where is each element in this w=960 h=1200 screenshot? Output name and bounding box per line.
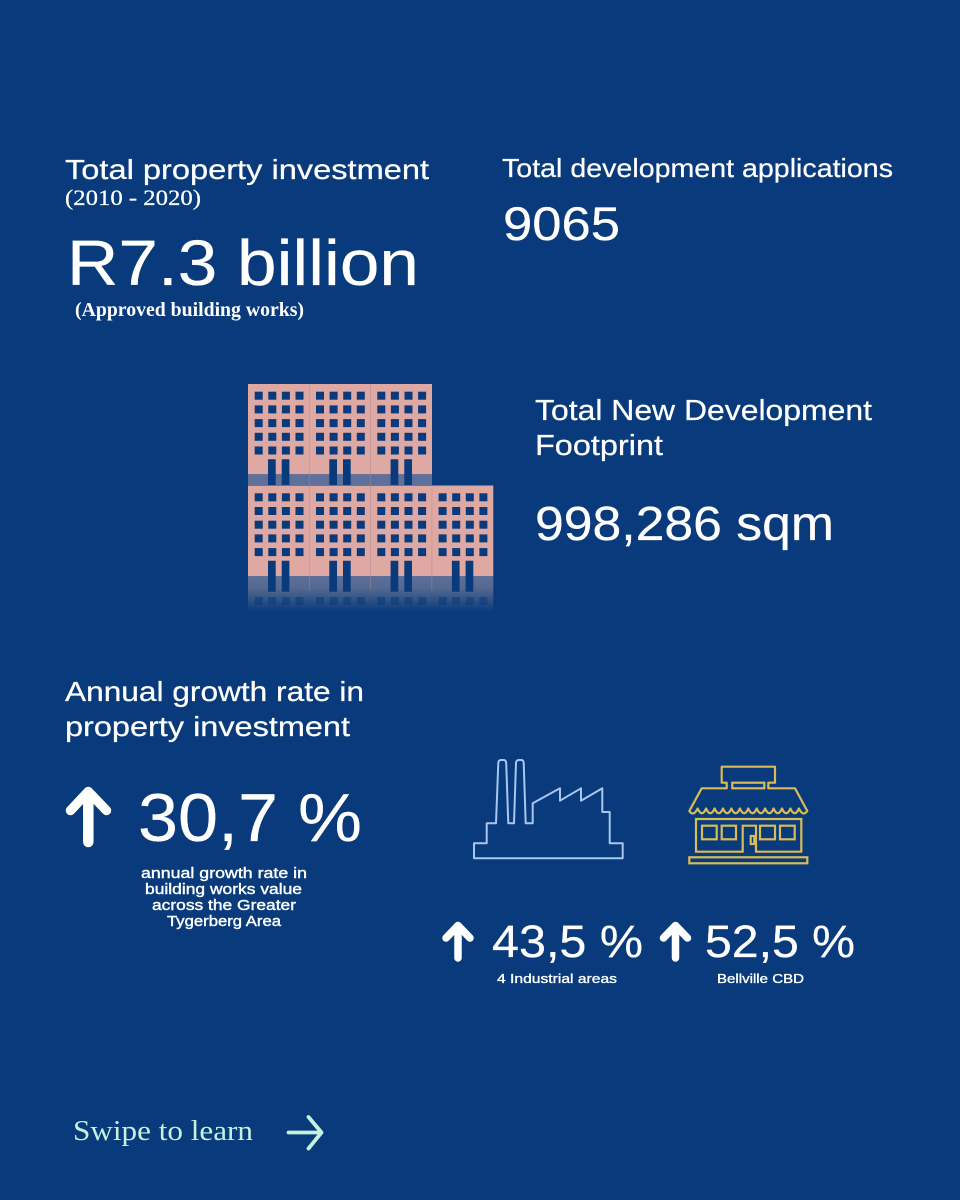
caption: greater tygerberg growth: building works value <box>145 881 302 898</box>
stat: 52,5 % bellville cbd <box>664 916 855 986</box>
upper row of buildings <box>248 384 432 485</box>
stat: total development applications <box>502 153 893 250</box>
swipe prompt <box>73 1116 322 1148</box>
stat: total property investment: Total property investment <box>65 154 429 185</box>
caption: greater tygerberg growth: annual growth rate in <box>141 865 307 882</box>
stat: 30,7 % growth: 30,7 % <box>138 780 362 856</box>
icon: right arrow <box>288 1117 322 1148</box>
stat: total new development footprint <box>535 395 872 551</box>
stat: total development applications: 9065 <box>503 197 620 250</box>
stat: 43,5 % industrial areas <box>446 916 643 986</box>
heading: annual growth rate <box>65 676 364 742</box>
stat: total new development footprint: Footprint <box>535 430 663 462</box>
stat: 43,5 % industrial areas: 4 Industrial areas <box>497 971 618 986</box>
caption: greater tygerberg growth: Tygerberg Area <box>167 913 282 930</box>
caption: greater tygerberg growth: across the Greater <box>152 897 296 914</box>
stat: 43,5 % industrial areas: 43,5 % <box>492 916 643 967</box>
icon: shop <box>689 767 807 863</box>
icon: up arrow <box>446 926 470 958</box>
icon: up arrow <box>70 792 106 842</box>
stat: 52,5 % bellville cbd: Bellville CBD <box>717 971 804 986</box>
stat: total new development footprint: 998,286 sqm <box>535 498 834 551</box>
heading: annual growth rate: Annual growth rate in <box>65 676 364 707</box>
icon: factory <box>474 760 623 858</box>
stat: total property investment: (Approved building works) <box>75 299 304 321</box>
caption: greater tygerberg growth <box>141 865 307 930</box>
stat: total property investment <box>65 154 429 321</box>
heading: annual growth rate: property investment <box>65 711 350 742</box>
swipe prompt: Swipe to learn <box>73 1116 253 1147</box>
stat: 30,7 % growth <box>70 780 362 930</box>
icon: apartment buildings <box>248 384 493 612</box>
icon: up arrow <box>664 926 688 958</box>
stat: total property investment: (2010 - 2020) <box>65 185 201 210</box>
stat: total development applications: Total development applications <box>502 153 893 183</box>
lower row of buildings <box>248 485 493 612</box>
stat: total new development footprint: Total New Development <box>535 395 872 427</box>
stat: total property investment: R7.3 billion <box>67 227 419 299</box>
stat: 52,5 % bellville cbd: 52,5 % <box>705 916 855 967</box>
